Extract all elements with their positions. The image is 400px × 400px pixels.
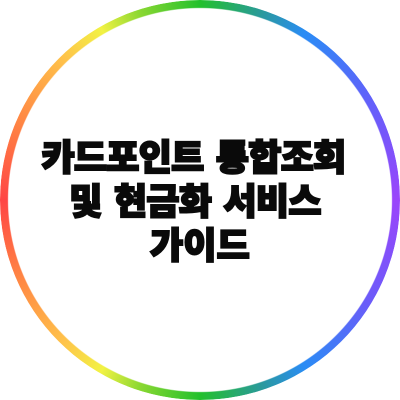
title: 및 현금화 서비스	[69, 181, 321, 222]
title: 가이드	[150, 225, 250, 266]
title: 카드포인트 통합조회	[41, 137, 346, 178]
title	[40, 137, 346, 266]
